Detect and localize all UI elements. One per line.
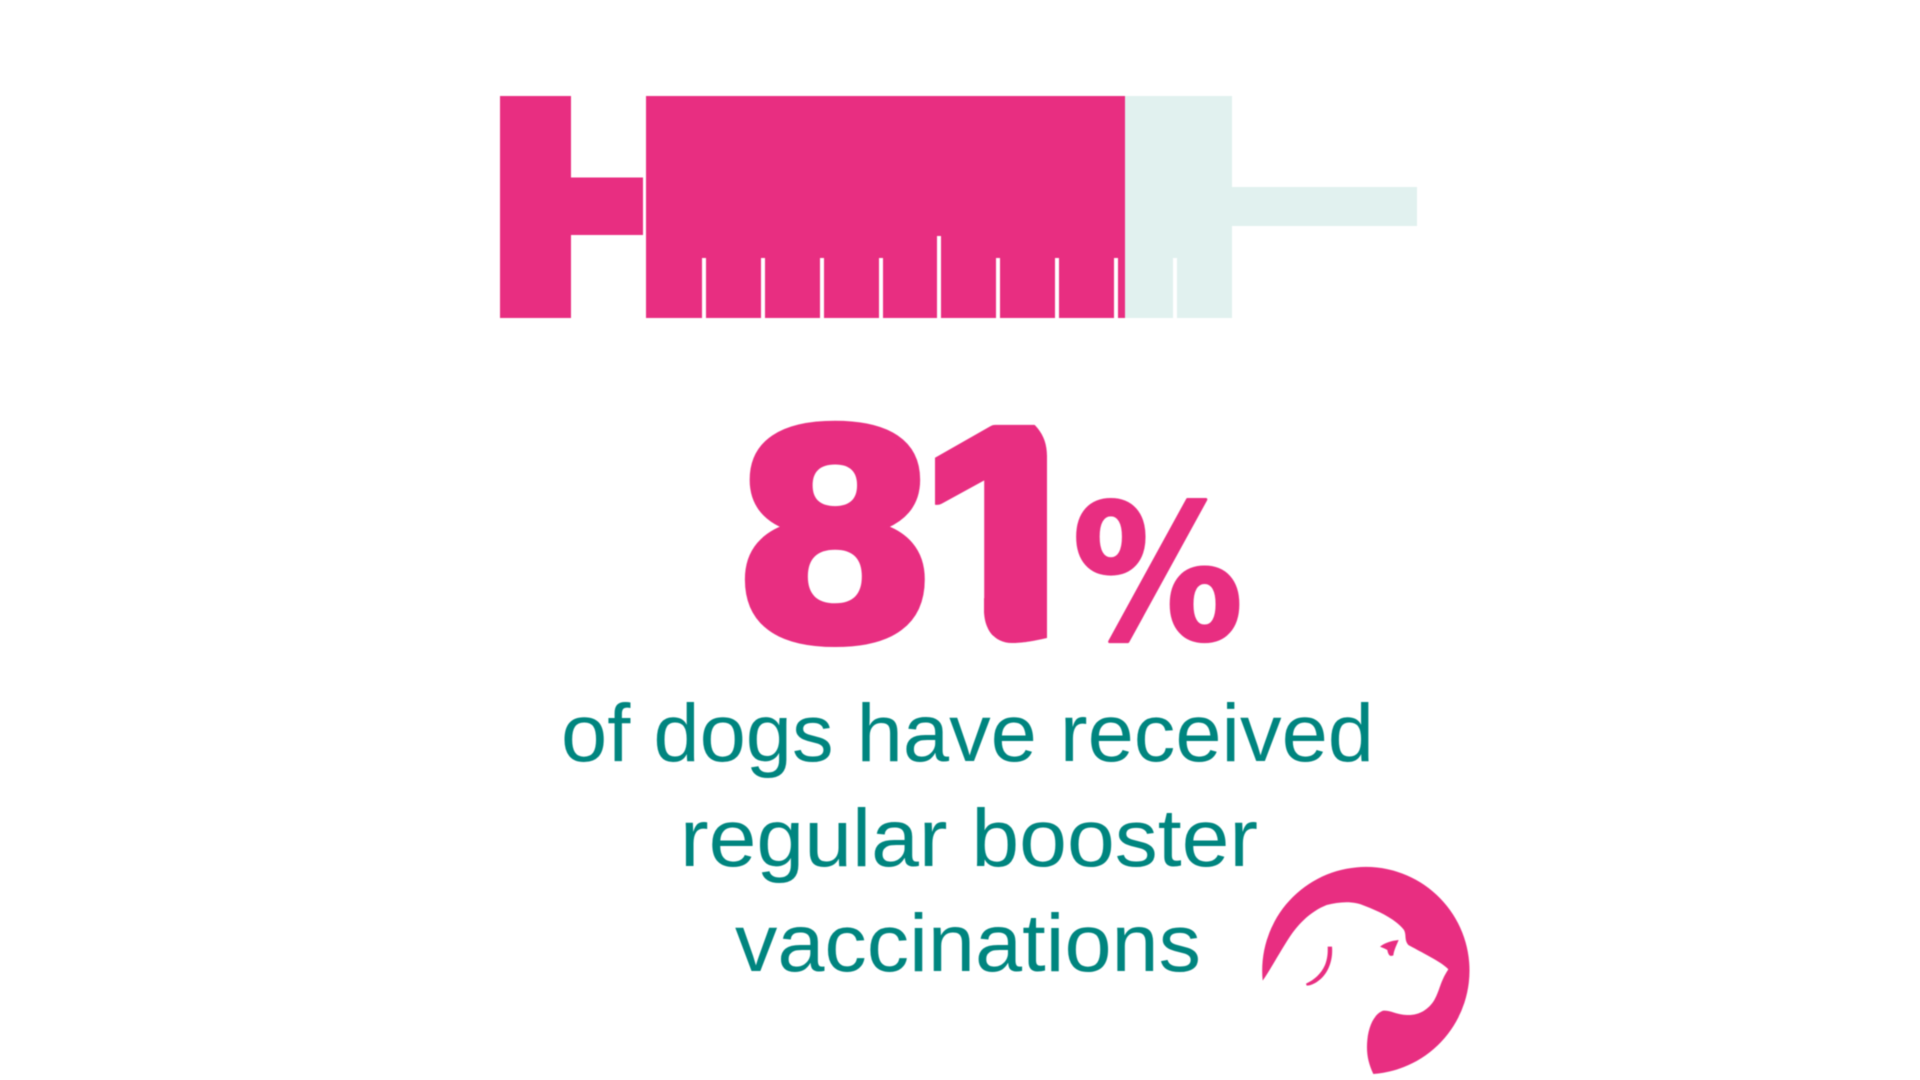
statistic: 81%: 8 (732, 373, 938, 706)
syringe plunger (500, 96, 643, 318)
syringe scale ticks (702, 236, 1177, 318)
syringe barrel filled portion (646, 96, 1125, 318)
icon: dog head logo (1262, 867, 1470, 1074)
description text: of dogs have received (561, 688, 1374, 779)
dog logo circle with head silhouette (1262, 867, 1470, 1074)
statistic: 81%: 1 (914, 369, 1102, 699)
statistic: 81%: % (1072, 465, 1243, 684)
syringe needle (1232, 187, 1417, 226)
dog ear line (1306, 947, 1332, 986)
description text: vaccinations (735, 898, 1201, 989)
dog eye (1380, 940, 1399, 956)
syringe barrel empty portion (1125, 96, 1232, 318)
statistic: 81% (744, 420, 1240, 648)
icon: syringe 81% filled (500, 96, 1417, 318)
description text: regular booster (680, 793, 1258, 884)
description text (561, 688, 1374, 989)
